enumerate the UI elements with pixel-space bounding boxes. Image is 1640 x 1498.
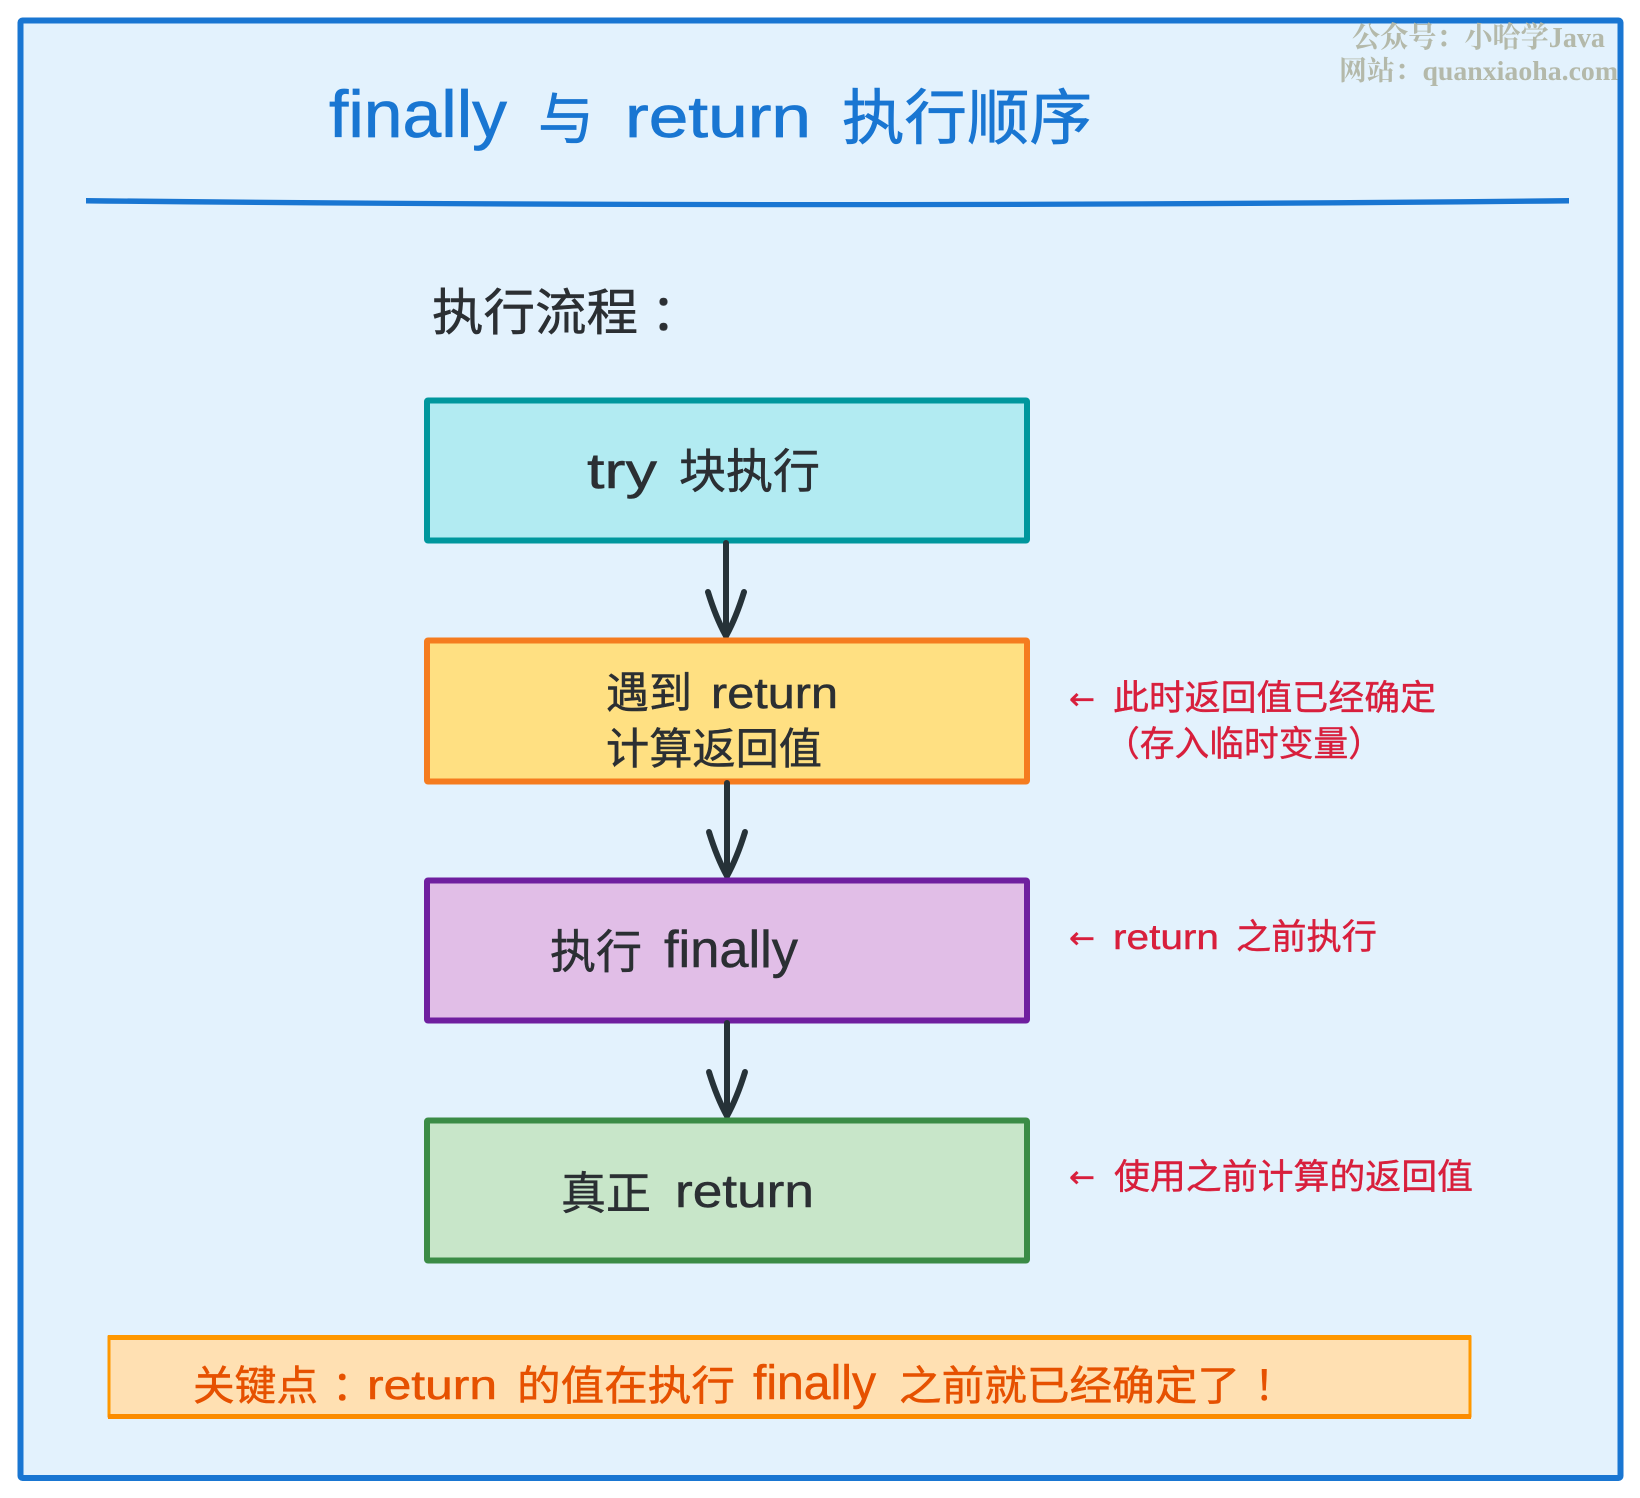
step 2: return reached: 遇到 [606,659,692,721]
note: step 3: ← [1069,921,1095,956]
note: step 2: ← [1069,682,1095,717]
watermark: 公众号：小哈学Java [1352,21,1605,54]
title: 执行顺序 [842,70,1092,157]
title: 与 [538,75,594,156]
callout: key point: 之前就已经确定了 [899,1352,1240,1412]
step 1: try block [427,400,1027,540]
title divider [86,198,1569,207]
heading: flow: ： [651,273,701,345]
step 4: real return: 真正 [561,1157,651,1222]
step 3: finally [427,880,1027,1020]
step 2: return reached [427,640,1027,782]
note: step 2 [1069,670,1436,767]
step 3: finally: 执行 [550,916,642,982]
title [329,70,1092,157]
callout: key point: ！ [1254,1352,1295,1412]
callout: key point: finally [753,1357,876,1410]
callout: key point: 关键点 [193,1352,318,1412]
step 4: real return: return [675,1165,814,1217]
title: finally [329,77,507,151]
callout: key point [108,1335,1471,1419]
step 4: real return [427,1120,1027,1260]
step 2: return reached: return [711,669,838,718]
arrow 1 [708,543,744,636]
callout: key point: ： [332,1352,373,1412]
note: step 3: 之前执行 [1236,909,1377,960]
note: step 3: return [1113,918,1219,957]
callout: key point: return [367,1362,497,1408]
heading: flow: 执行流程 [432,273,638,345]
note: step 2: 此时返回值已经确定 [1113,670,1436,721]
watermark [1339,21,1619,86]
step 1: try block: try [587,443,657,499]
note: step 4: 使用之前计算的返回值 [1114,1149,1473,1200]
watermark: 网站：quanxiaoha.com [1339,56,1619,86]
arrow 2 [709,783,745,876]
note: step 2: （存入临时变量） [1105,716,1383,767]
step 3: finally: finally [664,921,798,979]
arrow 3 [709,1023,745,1116]
title: return [625,85,811,150]
step 1: try block: 块执行 [679,433,820,502]
note: step 3 [1069,909,1377,960]
note: step 4: ← [1069,1160,1095,1195]
step 2: return reached: 计算返回值 [606,715,822,777]
callout: key point: 的值在执行 [517,1352,735,1412]
